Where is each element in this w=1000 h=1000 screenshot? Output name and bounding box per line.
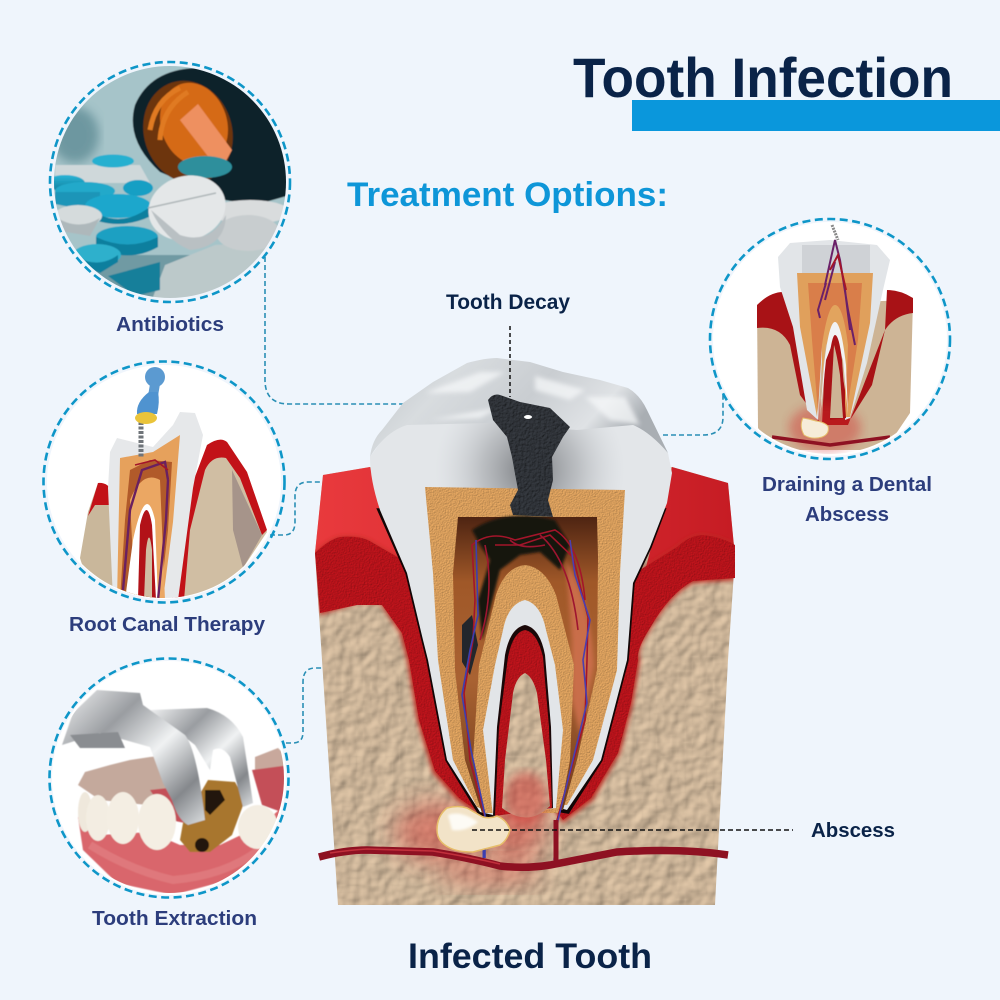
dashed ring	[50, 658, 288, 898]
tooth body	[370, 410, 672, 815]
orange dentin layer	[425, 487, 625, 812]
circle background	[713, 222, 947, 456]
label: abscess: Abscess	[811, 820, 895, 842]
decayed tooth	[180, 780, 245, 852]
circle background	[52, 661, 286, 895]
label: infected tooth: Infected Tooth	[408, 937, 652, 976]
bone between roots	[502, 673, 550, 818]
inner root red arch	[495, 630, 552, 816]
table surface	[55, 165, 150, 183]
blood vessel under tooth	[319, 850, 728, 867]
label: antibiotics: Antibiotics	[116, 314, 224, 336]
nerves and blood vessels	[462, 530, 590, 860]
photo: pills and bottle	[45, 62, 290, 305]
panel: draining a dental abscess	[710, 219, 950, 526]
dark red gum tissue	[315, 535, 735, 820]
soft gum edge	[315, 535, 735, 823]
back teeth	[78, 756, 166, 805]
gum	[78, 810, 280, 893]
enamel highlights	[425, 372, 640, 425]
inner white arch	[483, 600, 563, 816]
title block	[573, 46, 1000, 131]
circle background	[47, 365, 281, 599]
panel: root canal therapy	[44, 362, 284, 636]
label: root canal therapy: Root Canal Therapy	[69, 614, 266, 636]
file handle	[135, 367, 165, 458]
tooth shadow outline	[379, 510, 664, 816]
forceps arm back	[150, 708, 253, 807]
connectors between treatments and tooth	[265, 257, 723, 743]
panel: antibiotics	[45, 62, 290, 336]
abscess	[437, 806, 510, 852]
mini tooth with file	[80, 412, 267, 600]
pill bottle	[133, 68, 290, 205]
tooth decay cavity	[488, 395, 570, 517]
title accent bar	[632, 100, 1000, 131]
heading: treatment options: Treatment Options:	[347, 176, 668, 214]
dashed ring	[50, 62, 290, 302]
enamel crown	[370, 358, 668, 457]
mini infected tooth	[757, 225, 913, 452]
blue pills	[92, 154, 134, 168]
label: draining a dental abscess: Abscess	[805, 504, 889, 526]
inflamed pulp area right	[566, 560, 594, 735]
panel: tooth extraction	[50, 658, 290, 930]
inflammation around abscess	[395, 789, 545, 884]
pointer line: abscess	[472, 829, 793, 831]
inner dentin arch	[473, 565, 574, 813]
label: draining a dental abscess: Draining a Dental	[762, 474, 932, 496]
main illustration: infected tooth	[315, 358, 735, 905]
crown shading around decay	[451, 423, 608, 490]
dashed ring	[44, 362, 284, 602]
dashed ring	[710, 219, 950, 459]
black decay inside pulp	[472, 516, 570, 640]
pointer line: tooth decay	[509, 326, 511, 397]
front teeth	[78, 792, 92, 832]
extraction scene	[62, 690, 290, 895]
white pills	[54, 205, 102, 227]
light gum surface	[315, 467, 735, 590]
black line of inner arch	[493, 625, 553, 816]
forceps arm front	[62, 690, 205, 825]
jaw bone block	[315, 467, 735, 905]
label: tooth decay: Tooth Decay	[446, 291, 570, 314]
label: tooth extraction: Tooth Extraction	[92, 908, 257, 930]
pulp chamber	[453, 517, 598, 813]
title: Tooth Infection	[573, 46, 953, 109]
